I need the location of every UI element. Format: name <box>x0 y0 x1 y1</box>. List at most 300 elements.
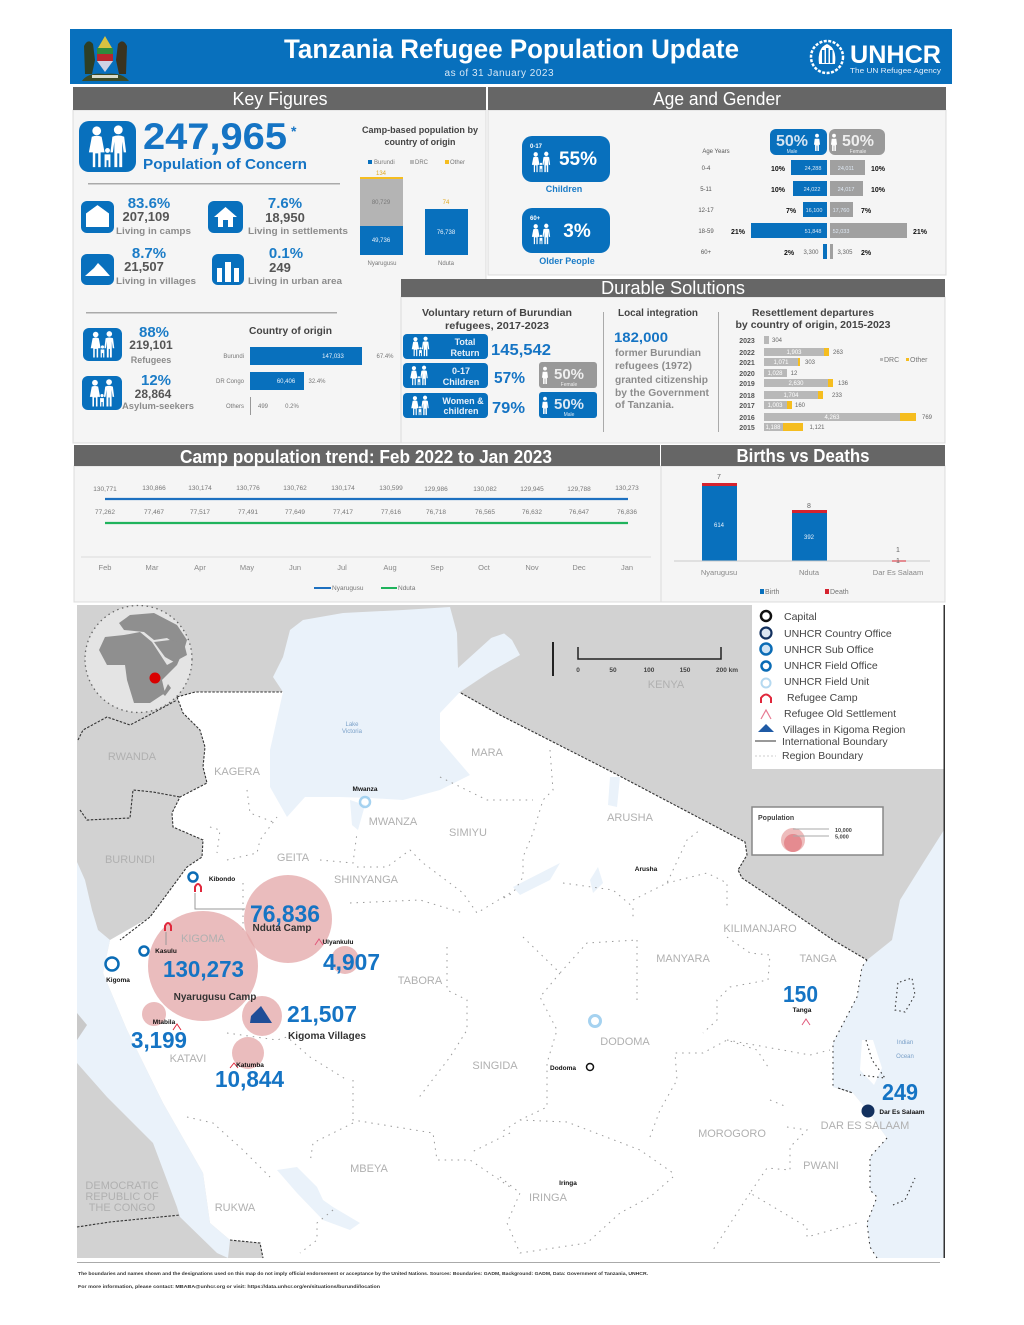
panel: key figures <box>73 87 486 443</box>
map legend: UNHCR Field Office <box>784 660 878 672</box>
chart: line trend: Feb <box>99 563 111 572</box>
stat: children 0-17: 0-17 <box>452 366 470 376</box>
map legend: International Boundary <box>782 736 888 748</box>
heading: durable solutions: Durable Solutions <box>601 278 745 298</box>
chart: resettlement departures: 2015 <box>739 425 755 432</box>
stat: refugees: Refugees <box>131 355 171 365</box>
chart: camp-based population by country of origin <box>360 125 478 267</box>
chart: camp-based population by country of origin: 76,738 <box>437 230 456 236</box>
chart: line trend: 130,273 <box>615 485 639 492</box>
stat: living in urban area: 249 <box>269 260 291 275</box>
chart: line trend: 130,599 <box>379 485 403 492</box>
stat: living in camps: 207,109 <box>122 209 170 224</box>
chart: resettlement departures: 1,028 <box>767 371 783 377</box>
local integration column: refugees (1972) <box>615 361 692 372</box>
chart: country of origin: 147,033 <box>322 354 344 360</box>
chart: resettlement departures: 1,704 <box>783 393 799 399</box>
region labels: KAGERA <box>214 766 261 778</box>
chart: resettlement departures <box>736 308 933 432</box>
region labels: KILIMANJARO <box>723 923 797 935</box>
stat: living in villages: 21,507 <box>124 259 164 274</box>
chart: line trend: Nyarugusu <box>332 585 364 592</box>
scale bar: 150 <box>680 667 691 674</box>
stat: living in villages <box>81 245 196 287</box>
camp figures: Nduta Camp <box>253 923 311 934</box>
map of Tanzania <box>77 605 945 1258</box>
chart: population pyramid: 7% <box>861 208 872 215</box>
card: children <box>522 136 610 194</box>
chart: resettlement departures: 160 <box>795 403 806 409</box>
male share: 50% <box>554 396 584 413</box>
heading: age and gender: Age and Gender <box>653 89 781 109</box>
chart: population pyramid: 10% <box>771 166 786 173</box>
stat: asylum-seekers <box>82 372 194 411</box>
chart: camp-based population by country of origin: Burundi <box>374 160 395 166</box>
local integration column: 182,000 <box>614 329 668 345</box>
stat: women and children <box>403 393 525 418</box>
map legend: Refugee Old Settlement <box>784 708 896 720</box>
chart: resettlement departures: 2019 <box>739 381 755 388</box>
stat: living in settlements: 18,950 <box>265 210 305 225</box>
chart: resettlement departures: 1,188 <box>765 425 781 431</box>
camp figures: 3,199 <box>131 1027 187 1053</box>
stat: children 0-17 <box>403 363 525 388</box>
card: children: 0-17 <box>530 144 543 150</box>
card: children: Children <box>546 184 582 194</box>
title: Tanzania Refugee Population Update <box>284 34 739 64</box>
stat: living in camps <box>81 195 191 237</box>
stat: refugees <box>83 324 173 365</box>
scale bar: 200 km <box>716 667 738 674</box>
chart: population pyramid: Age Years <box>702 149 730 155</box>
chart: country of origin <box>216 325 394 415</box>
place names: Dar Es Salaam <box>879 1109 925 1116</box>
female share <box>539 362 597 388</box>
chart: population pyramid: 2% <box>861 250 872 257</box>
chart: line trend: Sep <box>430 563 444 572</box>
header banner <box>70 29 952 84</box>
chart: line trend <box>81 485 651 592</box>
chart: resettlement departures: 2023 <box>739 338 755 345</box>
chart: camp-based population by country of origin: DRC <box>415 160 429 166</box>
chart: population pyramid: 3,300 <box>803 250 819 256</box>
map legend: UNHCR Field Unit <box>784 676 869 688</box>
card: older people: Older People <box>539 256 595 266</box>
local integration column <box>614 308 710 411</box>
chart: line trend: Jun <box>289 563 301 572</box>
heading: durable solutions <box>401 278 945 298</box>
chart: resettlement departures: 1,903 <box>786 350 802 356</box>
camp figures: 4,907 <box>323 949 380 975</box>
chart: population pyramid: 12-17 <box>698 208 714 214</box>
voluntary return column: refugees, 2017-2023 <box>445 321 549 332</box>
region labels: SINGIDA <box>472 1060 518 1072</box>
chart: line trend: 77,517 <box>190 509 210 516</box>
male header: 50% <box>776 133 808 150</box>
stat: total return: 145,542 <box>491 342 551 359</box>
female header: Female <box>850 149 867 155</box>
chart: country of origin: 67.4% <box>376 354 394 360</box>
chart: population pyramid: 3,305 <box>837 250 853 256</box>
chart: resettlement departures: 233 <box>832 393 843 399</box>
voluntary return column: Voluntary return of Burundian <box>422 308 572 319</box>
stat: total return: Total <box>455 337 475 347</box>
place names: Arusha <box>635 866 658 873</box>
map legend: Refugee Camp <box>787 692 858 704</box>
international boundaries <box>77 692 915 1258</box>
map legend: Region Boundary <box>782 750 864 762</box>
chart: stacked bars: Nduta <box>799 568 820 577</box>
chart: resettlement departures: 2018 <box>739 393 755 400</box>
ocean <box>833 830 944 1258</box>
chart: resettlement departures: DRC <box>884 357 899 364</box>
camp figures: 150 <box>783 981 818 1007</box>
region labels: Lake <box>345 722 359 728</box>
region labels: KIGOMA <box>181 933 226 945</box>
chart: stacked bars: 8 <box>807 503 811 510</box>
chart: resettlement departures: 4,263 <box>824 415 840 421</box>
voluntary return column <box>403 308 597 418</box>
chart: resettlement departures: 12 <box>791 371 798 377</box>
chart: line trend: Mar <box>146 563 159 572</box>
female share: Female <box>561 382 578 388</box>
place names <box>106 786 925 1187</box>
chart: population pyramid: 10% <box>871 187 886 194</box>
chart: population pyramid: 21% <box>731 229 746 236</box>
chart: population pyramid: 10% <box>871 166 886 173</box>
camp figures: 130,273 <box>163 956 244 982</box>
chart: population pyramid: 51,848 <box>805 229 821 235</box>
region labels: Indian <box>897 1040 913 1046</box>
chart: line trend: 76,836 <box>617 509 637 516</box>
card: older people: 60+ <box>530 216 541 222</box>
region labels: MANYARA <box>656 953 710 965</box>
chart: population pyramid: 10% <box>771 187 786 194</box>
female header: 50% <box>842 133 874 150</box>
chart: resettlement departures: 769 <box>922 415 933 421</box>
population size legend: 5,000 <box>835 834 849 840</box>
chart: stacked bars: 7 <box>717 474 721 481</box>
chart: population pyramid: 0-4 <box>702 166 711 172</box>
chart: resettlement departures: 1,071 <box>773 360 789 366</box>
chart: line trend: Jan <box>621 563 633 572</box>
region labels: GEITA <box>277 852 310 864</box>
chart: population pyramid: 16,100 <box>806 208 822 214</box>
camp figures: 249 <box>882 1079 918 1105</box>
card: children: 55% <box>559 149 597 170</box>
chart: line trend: 76,718 <box>426 509 446 516</box>
chart: line trend: 130,082 <box>473 486 497 493</box>
chart: population pyramid <box>698 129 928 259</box>
region labels: DAR ES SALAAM <box>821 1120 909 1132</box>
local integration column: Local integration <box>618 308 698 319</box>
place names: Kasulu <box>155 948 177 955</box>
chart: resettlement departures: 2022 <box>739 350 755 357</box>
stat: total return <box>403 334 551 359</box>
region labels: TABORA <box>398 975 443 987</box>
chart: population pyramid: 18-59 <box>698 229 714 235</box>
camp figures: 10,844 <box>215 1066 284 1092</box>
chart: resettlement departures: 136 <box>838 381 849 387</box>
chart: line trend: 77,649 <box>285 509 305 516</box>
icon: population of concern <box>79 121 136 172</box>
UNHCR logo: UNHCR <box>850 41 941 69</box>
male share <box>539 392 597 418</box>
region labels: MOROGORO <box>698 1128 766 1140</box>
region labels: RUKWA <box>215 1202 256 1214</box>
heading: camp population trend <box>74 445 660 467</box>
region labels: MARA <box>471 747 504 759</box>
chart: camp-based population by country of origin: 80,729 <box>372 200 391 206</box>
stat: asylum-seekers: Asylum-seekers <box>122 401 194 411</box>
chart: line trend: 77,417 <box>333 509 353 516</box>
local integration column: of Tanzania. <box>615 400 674 411</box>
chart: line trend: 77,467 <box>144 509 164 516</box>
chart: resettlement departures: 2016 <box>739 415 755 422</box>
population size legend: 10,000 <box>835 828 852 834</box>
chart: country of origin: DR Congo <box>216 379 245 385</box>
chart: line trend: 77,262 <box>95 509 115 516</box>
region labels: KENYA <box>648 679 685 691</box>
chart: country of origin: Others <box>226 404 244 410</box>
camp figures: Nyarugusu Camp <box>174 992 256 1003</box>
stat: refugees: 88% <box>139 324 169 341</box>
Lake Rukwa <box>277 1167 360 1230</box>
chart: stacked bars: Death <box>830 589 849 596</box>
place names: Katumba <box>236 1062 264 1069</box>
chart: camp-based population by country of origin: 49,736 <box>372 238 391 244</box>
local integration column: by the Government <box>615 388 710 399</box>
chart: line trend: Jul <box>337 563 347 572</box>
chart: population pyramid: 60+ <box>701 250 712 256</box>
place names: Tanga <box>793 1007 812 1014</box>
region labels: MWANZA <box>369 816 418 828</box>
total population figure: 247,965 <box>143 116 287 157</box>
chart: line trend: Oct <box>478 563 491 572</box>
chart: stacked bars: 614 <box>714 523 725 529</box>
local integration column: granted citizenship <box>615 375 708 386</box>
chart: population pyramid: 2% <box>784 250 795 257</box>
male share: Male <box>564 412 575 418</box>
panel: durable solutions <box>401 278 945 443</box>
region labels: THE CONGO <box>89 1202 156 1214</box>
chart: resettlement departures: Other <box>910 357 928 364</box>
panel: age and gender <box>488 87 946 275</box>
chart: resettlement departures: 1,121 <box>809 425 825 431</box>
chart: line trend: May <box>240 563 254 572</box>
chart: resettlement departures: 2,630 <box>788 381 804 387</box>
chart: resettlement departures: by country of origin, 2015-2023 <box>736 320 891 331</box>
chart: country of origin: 499 <box>258 404 269 410</box>
Lake Victoria <box>270 607 520 817</box>
region labels <box>85 679 914 1214</box>
region labels: BURUNDI <box>105 854 155 866</box>
population size legend: Population <box>758 815 794 822</box>
stat: asylum-seekers: 28,864 <box>135 387 172 401</box>
chart: line trend: 130,174 <box>188 485 212 492</box>
Tanzania land <box>103 692 887 1258</box>
map legend: Capital <box>784 611 817 623</box>
region labels: RWANDA <box>108 751 157 763</box>
stat: asylum-seekers: 12% <box>141 372 171 389</box>
label: population of concern: Population of Concern <box>143 156 307 173</box>
camp bubbles <box>142 875 359 1069</box>
map legend: UNHCR Sub Office <box>784 644 874 656</box>
chart: line trend: Nduta <box>398 585 416 592</box>
region labels: Ocean <box>896 1054 914 1060</box>
stat: living in settlements: 7.6% <box>268 195 302 212</box>
chart: camp-based population by country of origin: Nduta <box>438 261 455 267</box>
population size legend <box>752 807 883 855</box>
chart: population pyramid: 24,288 <box>805 166 821 172</box>
chart: line trend: 77,491 <box>238 509 258 516</box>
UNHCR logo: The UN Refugee Agency <box>850 68 942 75</box>
map legend: Villages in Kigoma Region <box>783 724 906 736</box>
female header <box>829 129 885 155</box>
place names: Iringa <box>559 1180 577 1187</box>
office and camp markers <box>106 797 874 1118</box>
footer note <box>77 1262 940 1289</box>
chart: resettlement departures: 263 <box>833 350 844 356</box>
chart: line trend: 130,771 <box>93 486 117 493</box>
camp figures: 21,507 <box>287 1001 357 1027</box>
male header <box>770 129 827 155</box>
heading: key figures: Key Figures <box>232 89 328 109</box>
camp figures: 76,836 <box>250 901 320 928</box>
region labels: DEMOCRATIC <box>85 1180 159 1192</box>
chart: resettlement departures: 2020 <box>739 371 755 378</box>
inset globe <box>85 606 192 712</box>
stat: living in settlements <box>208 195 348 237</box>
chart: population pyramid: 24,022 <box>804 187 820 193</box>
chart: camp-based population by country of origin: 134 <box>376 171 387 177</box>
stat: total return: Return <box>450 348 480 358</box>
chart: line trend: 129,945 <box>520 486 544 493</box>
camp figures: Kigoma Villages <box>288 1031 366 1042</box>
chart: resettlement departures: Resettlement departures <box>752 308 874 319</box>
stat: living in villages: 8.7% <box>132 245 166 262</box>
panel: births vs deaths <box>661 445 945 602</box>
stat: living in urban area <box>212 245 343 287</box>
chart: line trend: Dec <box>572 563 586 572</box>
region labels: IRINGA <box>529 1192 568 1204</box>
region labels: Victoria <box>342 729 363 735</box>
scale bar: 100 <box>644 667 655 674</box>
place names: Ulyankulu <box>322 939 354 946</box>
card: older people: 3% <box>563 221 591 242</box>
place names: Kibondo <box>209 876 235 883</box>
chart: line trend: 130,866 <box>142 485 166 492</box>
chart: population pyramid: 7% <box>786 208 797 215</box>
chart: stacked bars: Birth <box>765 589 780 596</box>
chart: camp-based population by country of origin: country of origin <box>384 137 456 147</box>
chart: resettlement departures: 1,003 <box>767 403 783 409</box>
asterisk: * <box>291 123 297 139</box>
chart: population pyramid: 52,033 <box>833 229 849 235</box>
heading: births vs deaths: Births vs Deaths <box>736 446 870 466</box>
heading: key figures <box>73 87 486 110</box>
stat: children 0-17: 57% <box>494 370 525 387</box>
place names: Mwanza <box>353 786 378 793</box>
chart: resettlement departures: 2017 <box>739 403 755 410</box>
region labels: SIMIYU <box>449 827 487 839</box>
chart: population pyramid: 5-11 <box>700 187 712 193</box>
scale bar: 0 <box>576 667 580 674</box>
chart: resettlement departures: 2021 <box>739 360 755 367</box>
chart: country of origin: Country of origin <box>249 325 332 337</box>
place names: Mtabila <box>153 1019 176 1026</box>
chart: line trend: 130,174 <box>331 485 355 492</box>
subtitle date: as of 31 January 2023 <box>444 68 554 79</box>
heading: camp population trend: Camp population trend: Feb 2022 to Jan 2023 <box>180 447 552 467</box>
chart: line trend: 76,632 <box>522 509 542 516</box>
Zanzibar island <box>860 1040 882 1085</box>
chart: camp-based population by country of origin: Camp-based population by <box>362 125 478 135</box>
region labels: ARUSHA <box>607 812 654 824</box>
chart: stacked bars: Nyarugusu <box>701 568 737 577</box>
card: older people <box>522 208 610 266</box>
region labels: SHINYANGA <box>334 874 399 886</box>
chart: country of origin: 60,406 <box>277 379 296 385</box>
icon: Tanzania coat of arms <box>82 36 129 81</box>
region labels: PWANI <box>803 1160 839 1172</box>
region labels: KATAVI <box>170 1053 206 1065</box>
chart: line trend: Apr <box>194 563 206 572</box>
panel: camp population trend <box>74 445 661 602</box>
male header: Male <box>787 149 798 155</box>
female share: 50% <box>554 366 584 383</box>
chart: stacked bars: 1 <box>896 547 900 554</box>
chart: population pyramid: 21% <box>913 229 928 236</box>
place names: Dodoma <box>550 1065 576 1072</box>
small lakes <box>350 777 620 895</box>
region labels: MBEYA <box>350 1163 389 1175</box>
stat: children 0-17: Children <box>443 377 479 387</box>
region labels: TANGA <box>799 953 837 965</box>
chart: line trend: 129,986 <box>424 486 448 493</box>
place names: Kigoma <box>106 977 130 984</box>
map legend: UNHCR Country Office <box>784 628 892 640</box>
footer note: The boundaries and names shown and the designations used on this map do not imply official endorsement or acceptance by the United Nations. Sources: Boundaries: GADM, Background: GADM, Data: Government of Tanzania, UNHCR. <box>78 1271 648 1276</box>
stat: women and children: children <box>443 406 479 416</box>
chart: line trend: Nov <box>525 563 539 572</box>
chart: stacked bars <box>674 474 930 596</box>
chart: resettlement departures: 304 <box>772 338 783 344</box>
camp figures <box>131 901 918 1105</box>
map legend <box>752 605 944 769</box>
chart: line trend: 76,565 <box>475 509 495 516</box>
chart: population pyramid: 17,760 <box>833 208 849 214</box>
chart: line trend: 129,788 <box>567 486 591 493</box>
chart: line trend: 77,616 <box>381 509 401 516</box>
stat: women and children: Women & <box>442 396 484 406</box>
chart: population pyramid: 24,011 <box>838 166 854 172</box>
chart: country of origin: 32.4% <box>308 379 326 385</box>
chart: camp-based population by country of origin: 74 <box>443 200 450 206</box>
local integration column: former Burundian <box>615 348 701 359</box>
Lake Tanganyika <box>77 862 230 1258</box>
chart: line trend: 130,776 <box>236 485 260 492</box>
stat: living in urban area: Living in urban area <box>248 276 343 287</box>
heading: births vs deaths <box>661 445 945 466</box>
chart: country of origin: Burundi <box>223 354 244 360</box>
stat: living in settlements: Living in settlements <box>248 226 348 237</box>
stat: women and children: 79% <box>492 400 525 417</box>
chart: camp-based population by country of origin: Other <box>450 160 465 166</box>
region labels: DODOMA <box>600 1036 650 1048</box>
footer note: For more information, please contact: MBABA@unhcr.org or visit: https://data.unhcr.org/en/situations/burundi/location <box>78 1284 380 1289</box>
chart: stacked bars: 392 <box>804 535 815 541</box>
